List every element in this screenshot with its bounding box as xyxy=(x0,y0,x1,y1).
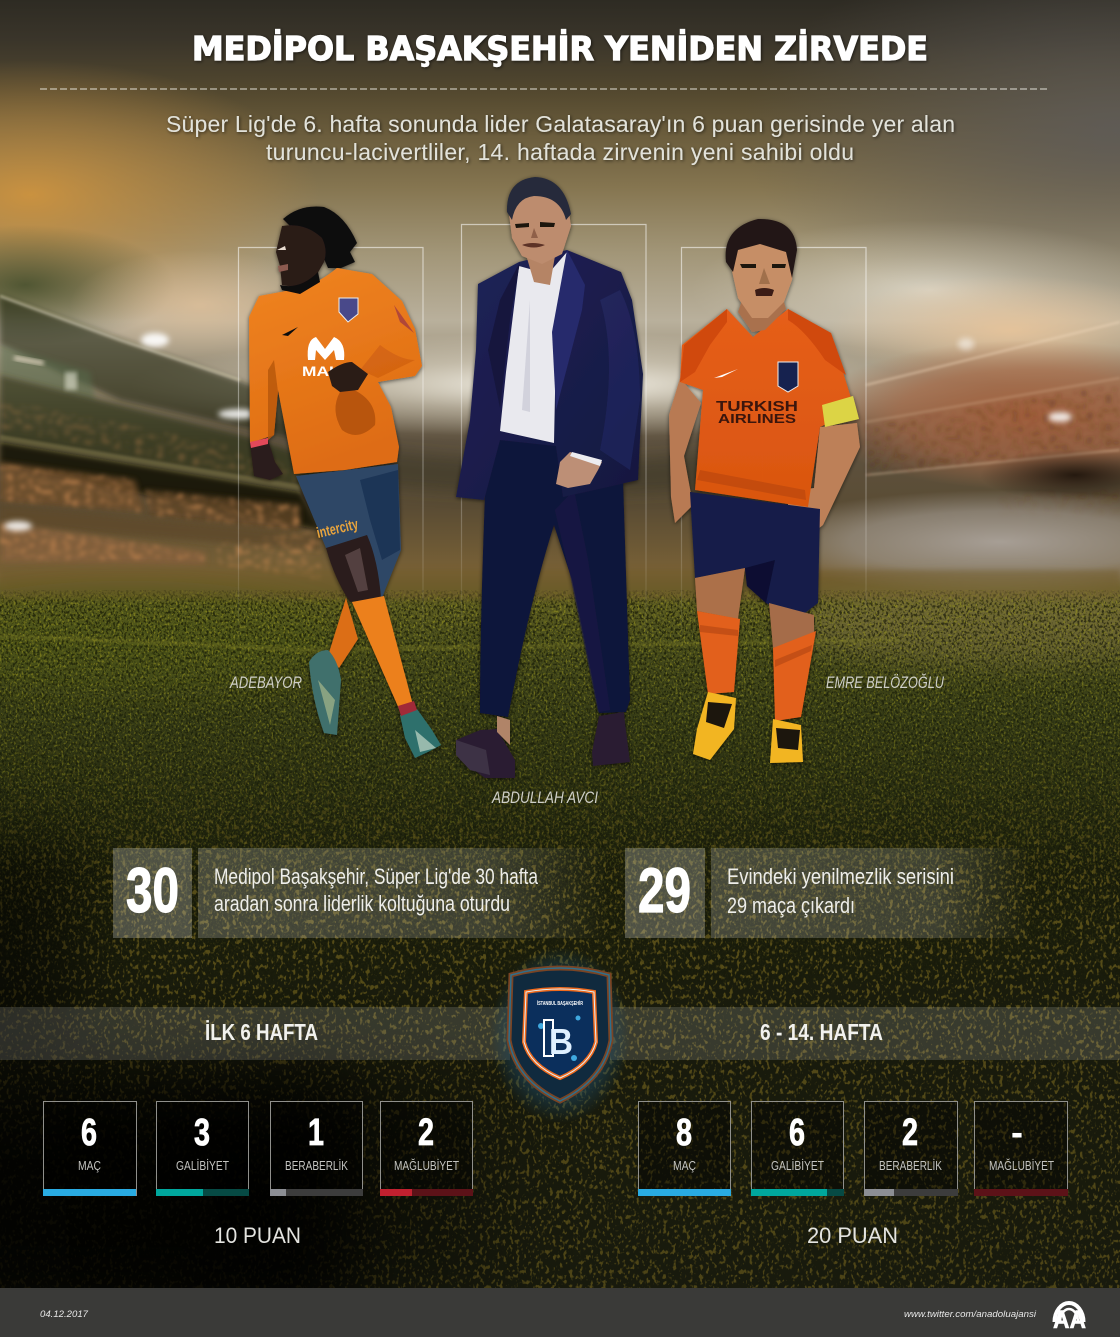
icon: club crest: B xyxy=(549,1021,573,1062)
stat: 1 beraberlik xyxy=(270,1102,363,1196)
stat: 3 galibiyet: GALİBİYET xyxy=(176,1158,229,1173)
stat: 2 mağlubiyet xyxy=(380,1102,473,1196)
stat: 2 beraberlik xyxy=(864,1102,958,1196)
stat: 6 galibiyet: GALİBİYET xyxy=(771,1158,824,1173)
stats: first 6 weeks xyxy=(43,1102,473,1196)
pitch xyxy=(0,570,1120,1335)
figure: Adebayor: intercity xyxy=(315,516,360,542)
figure: Emre Belözoğlu: AIRLINES xyxy=(718,411,796,426)
icon: club crest: İSTANBUL BAŞAKŞEHİR xyxy=(537,1000,583,1007)
stat: 6 maç: 6 xyxy=(81,1112,97,1154)
subtitle xyxy=(166,111,955,165)
figure: Abdullah Avcı xyxy=(456,177,643,778)
stat: 8 maç: MAÇ xyxy=(673,1158,696,1173)
title: MEDİPOL BAŞAKŞEHİR YENİDEN ZİRVEDE xyxy=(192,28,928,68)
stat: 8 maç xyxy=(638,1102,731,1196)
stat: 1 beraberlik: BERABERLİK xyxy=(285,1158,348,1173)
stat: no losses xyxy=(974,1102,1068,1196)
panel: 30 hafta fact: 30 xyxy=(126,856,179,926)
band: 6-14. hafta xyxy=(610,1007,1120,1060)
panel: 30 hafta fact: aradan sonra liderlik koltuğuna oturdu xyxy=(214,891,510,916)
stat: 3 galibiyet: 3 xyxy=(194,1112,210,1154)
stadium roof and tiers, left xyxy=(0,296,330,580)
panel: 29 maç fact: 29 xyxy=(638,856,691,926)
band: 6-14. hafta: 6 - 14. HAFTA xyxy=(760,1019,883,1045)
stat: 1 beraberlik: 1 xyxy=(308,1112,324,1154)
captions xyxy=(229,673,945,807)
stat: 2 beraberlik: BERABERLİK xyxy=(879,1158,942,1173)
stat: 3 galibiyet xyxy=(156,1102,249,1196)
stat: 2 mağlubiyet: 2 xyxy=(418,1112,434,1154)
stat: 6 maç xyxy=(43,1102,136,1196)
panel: 29 maç fact: Evindeki yenilmezlik serisini xyxy=(727,864,954,889)
panel: 29 maç fact: 29 maça çıkardı xyxy=(727,893,855,918)
footer bar: 04.12.2017 xyxy=(40,1309,89,1320)
subtitle: Süper Lig'de 6. hafta sonunda lider Galatasaray'ın 6 puan gerisinde yer alan xyxy=(166,111,955,137)
panel: 30 hafta fact: Medipol Başakşehir, Süper Lig'de 30 hafta xyxy=(214,864,539,889)
points: 20 puan: 20 PUAN xyxy=(807,1223,898,1248)
points: 10 puan: 10 PUAN xyxy=(214,1223,301,1248)
stat: 8 maç: 8 xyxy=(676,1112,692,1154)
stat: 2 beraberlik: 2 xyxy=(902,1112,918,1154)
stat: no losses: MAĞLUBİYET xyxy=(989,1158,1054,1173)
stat: no losses: - xyxy=(1011,1112,1023,1154)
figure: Adebayor xyxy=(249,206,441,758)
figure: Emre Belözoğlu xyxy=(669,219,860,763)
figure: Adebayor: MAKR xyxy=(302,363,354,379)
footer bar xyxy=(0,1288,1120,1337)
stadium tiers and fog, right xyxy=(819,322,1120,586)
icon: Anadolu Agency logo: AA xyxy=(1053,1306,1086,1334)
panel: 30 hafta fact xyxy=(113,848,608,938)
stat: 2 mağlubiyet: MAĞLUBİYET xyxy=(394,1158,459,1173)
band: İlk 6 hafta: İLK 6 HAFTA xyxy=(205,1019,318,1045)
centre tiers xyxy=(320,440,800,495)
player frames xyxy=(238,224,866,650)
captions: EMRE BELÖZOĞLU xyxy=(826,673,945,692)
band: İlk 6 hafta xyxy=(0,1007,510,1060)
stat: 6 galibiyet xyxy=(751,1102,844,1196)
panel: 29 maç fact xyxy=(625,848,1031,938)
subtitle: turuncu-lacivertliler, 14. haftada zirvenin yeni sahibi oldu xyxy=(266,139,854,165)
footer bar: www.twitter.com/anadoluajansi xyxy=(904,1309,1037,1320)
captions: ABDULLAH AVCI xyxy=(491,788,598,807)
captions: ADEBAYOR xyxy=(229,673,302,692)
stat: 6 maç: MAÇ xyxy=(78,1158,101,1173)
stats: weeks 6-14 xyxy=(638,1102,1068,1196)
icon: club crest xyxy=(490,947,630,1123)
figure: Emre Belözoğlu: TURKISH xyxy=(716,398,798,415)
stat: 6 galibiyet: 6 xyxy=(789,1112,805,1154)
